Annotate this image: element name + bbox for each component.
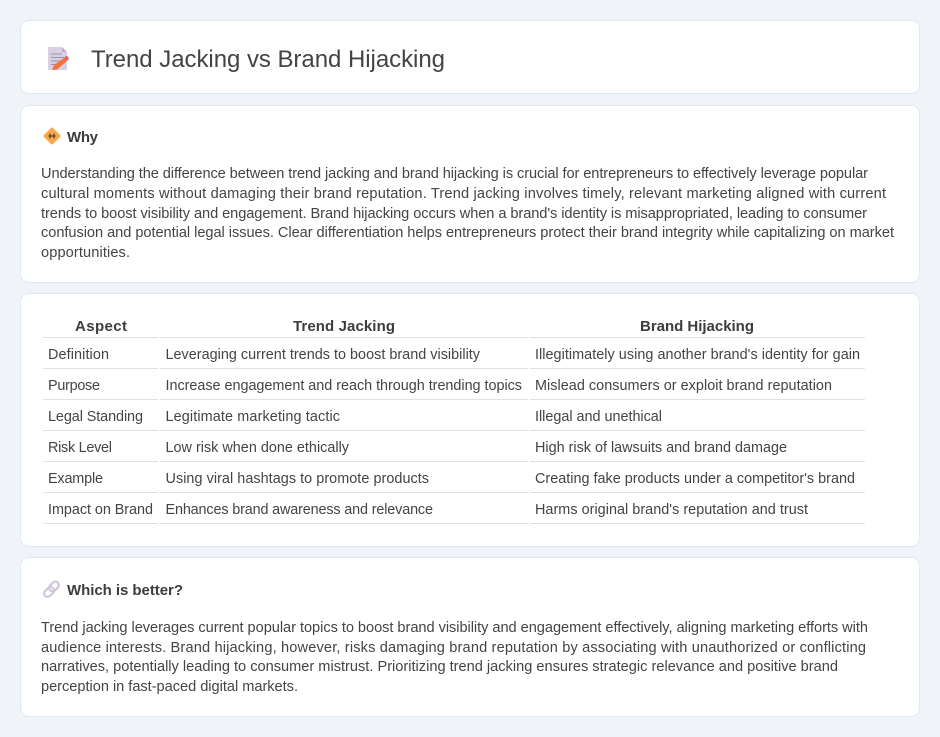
icon: warning diamond bbox=[43, 127, 61, 145]
text block: why paragraph bbox=[41, 166, 894, 261]
table row: definition: Illegitimately using another brand's identity for gain bbox=[535, 347, 860, 363]
table row: purpose: Increase engagement and reach through trending topics bbox=[166, 378, 522, 394]
table row: legal standing: Legitimate marketing tactic bbox=[166, 409, 340, 425]
table row: definition: Definition bbox=[48, 347, 109, 363]
text block: why paragraph: opportunities. bbox=[41, 245, 130, 261]
table row: legal standing: Illegal and unethical bbox=[535, 409, 662, 425]
table header row: Trend Jacking bbox=[293, 318, 395, 335]
panel: comparison table bbox=[20, 294, 920, 546]
table row: impact on brand: Harms original brand's reputation and trust bbox=[535, 502, 808, 518]
text block: why paragraph: trends to boost visibility and engagement. Brand hijacking occurs when a brand's identity is misappropriated, leading to consumer bbox=[41, 206, 867, 222]
table row: example: Using viral hashtags to promote products bbox=[166, 471, 429, 487]
text block: why paragraph: confusion and potential legal issues. Clear differentiation helps entrepreneurs protect their brand integrity while capitalizing on market bbox=[41, 225, 894, 241]
icon: link bbox=[43, 580, 60, 598]
text block: why paragraph: cultural moments without damaging their brand reputation. Trend jacking involves timely, relevant marketing aligned with current bbox=[41, 186, 886, 202]
table header row bbox=[75, 318, 754, 335]
table row: example: Example bbox=[48, 471, 103, 487]
table row: risk level: Risk Level bbox=[48, 440, 112, 456]
table row: definition: Leveraging current trends to boost brand visibility bbox=[166, 347, 481, 363]
table row: example bbox=[48, 471, 855, 487]
table header row: Aspect bbox=[75, 318, 127, 335]
table row: legal standing: Legal Standing bbox=[48, 409, 143, 425]
title: Trend Jacking vs Brand Hijacking bbox=[91, 46, 445, 73]
panel: title header bbox=[20, 20, 920, 94]
table row: impact on brand: Enhances brand awareness and relevance bbox=[166, 502, 433, 518]
table row: purpose bbox=[48, 378, 832, 394]
text block: which is better paragraph: audience interests. Brand hijacking, however, risks damaging brand reputation by associating with unauthorized or conflicting bbox=[41, 640, 866, 656]
panel: which is better bbox=[20, 558, 920, 716]
text block: which is better paragraph: narratives, potentially leading to consumer mistrust. Prioritizing trend jacking ensures strategic relevance and positive brand bbox=[41, 659, 838, 675]
table row: impact on brand: Impact on Brand bbox=[48, 502, 153, 518]
table row: risk level: Low risk when done ethically bbox=[166, 440, 350, 456]
table row: purpose: Purpose bbox=[48, 378, 100, 394]
table row: legal standing bbox=[48, 409, 662, 425]
table row: example: Creating fake products under a competitor's brand bbox=[535, 471, 855, 487]
table row: risk level: High risk of lawsuits and brand damage bbox=[535, 440, 787, 456]
heading: why: Why bbox=[67, 129, 99, 146]
table row: impact on brand bbox=[48, 502, 808, 518]
text block: which is better paragraph bbox=[41, 620, 868, 695]
text block: why paragraph: Understanding the difference between trend jacking and brand hijacking is crucial for entrepreneurs to effectively leverage popular bbox=[41, 166, 868, 182]
text block: which is better paragraph: Trend jacking leverages current popular topics to boost brand visibility and engagement effectively, aligning marketing efforts with bbox=[41, 620, 868, 636]
icon: memo with pencil bbox=[48, 47, 69, 70]
table row: purpose: Mislead consumers or exploit brand reputation bbox=[535, 378, 832, 394]
table header row: Brand Hijacking bbox=[640, 318, 754, 335]
table row: risk level bbox=[48, 440, 787, 456]
heading: which is better: Which is better? bbox=[67, 582, 183, 599]
panel: why bbox=[20, 106, 920, 282]
text block: which is better paragraph: perception in fast-paced digital markets. bbox=[41, 679, 298, 695]
table row: definition bbox=[48, 347, 860, 363]
